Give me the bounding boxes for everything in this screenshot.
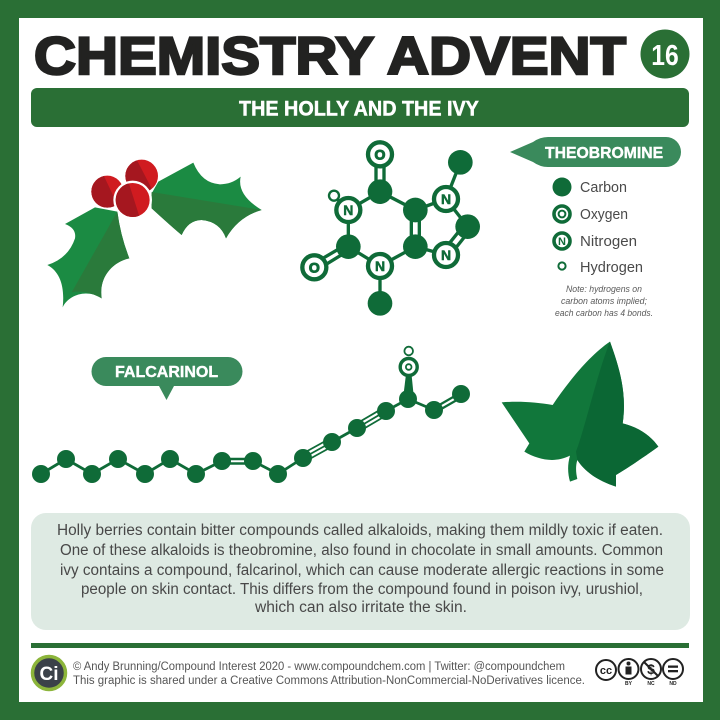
- icon: compound interest logo: [32, 656, 66, 690]
- legend: [552, 178, 643, 276]
- body text: One of these alkaloids is theobromine, also found in chocolate in small amounts. Common: [60, 542, 663, 559]
- theobromine hydrogen atom: [329, 191, 339, 201]
- holly berry top: [125, 160, 158, 190]
- body text: people on skin contact. This differs from the compound found in poison ivy, urushiol,: [81, 581, 643, 598]
- day number badge: [640, 30, 690, 78]
- footer rule: [31, 643, 689, 648]
- falcarinol carbon atoms: [32, 385, 470, 483]
- icon: holly: [47, 158, 262, 307]
- note text: carbon atoms implied;: [561, 296, 647, 306]
- footer credits: © Andy Brunning/Compound Interest 2020 - www.compoundchem.com | Twitter: @compoundchem: [73, 661, 565, 673]
- chart: falcarinol molecule: [32, 347, 470, 483]
- legend: oxygen: Oxygen: [580, 207, 628, 223]
- theobromine nitrogen atoms: N: [375, 258, 385, 274]
- label: falcarinol: [92, 357, 242, 400]
- label: theobromine: THEOBROMINE: [545, 145, 663, 162]
- note text: [555, 284, 653, 318]
- note text: each carbon has 4 bonds.: [555, 308, 653, 318]
- legend: nitrogen: [554, 233, 637, 250]
- footer credits: [73, 661, 585, 687]
- legend: nitrogen: Nitrogen: [580, 234, 637, 250]
- icon: creative commons licence badges: ND: [669, 681, 677, 687]
- label: falcarinol: FALCARINOL: [115, 364, 218, 381]
- body text: [57, 522, 664, 616]
- subtitle banner: THE HOLLY AND THE IVY: [239, 98, 479, 121]
- falcarinol hydroxyl group: [400, 347, 417, 399]
- theobromine nitrogen atoms: N: [441, 247, 451, 263]
- text panel: [31, 513, 690, 630]
- icon: compound interest logo: Ci: [40, 664, 58, 685]
- theobromine oxygen atoms: O: [375, 146, 386, 162]
- theobromine nitrogen atoms: N: [343, 202, 353, 218]
- theobromine bonds: [314, 162, 470, 303]
- icon: ivy leaf: [502, 342, 658, 487]
- holly berry left: [91, 176, 122, 208]
- icon: creative commons licence badges: $: [647, 661, 655, 677]
- theobromine carbon atoms: [336, 150, 480, 316]
- label: theobromine: [510, 137, 681, 167]
- title: CHEMISTRY ADVENT: [34, 26, 626, 85]
- theobromine nitrogen atoms: N: [441, 191, 451, 207]
- chart: theobromine molecule: [302, 142, 480, 316]
- holly right leaf: [152, 163, 262, 238]
- icon: creative commons licence badges: [596, 659, 683, 687]
- legend: hydrogen: Hydrogen: [580, 260, 643, 276]
- body text: ivy contains a compound, falcarinol, which can cause moderate allergic reactions in some: [60, 562, 664, 579]
- legend: nitrogen: N: [558, 236, 566, 248]
- note text: Note: hydrogens on: [566, 284, 642, 294]
- icon: creative commons licence badges: cc: [600, 665, 612, 677]
- legend: carbon: Carbon: [580, 180, 627, 196]
- theobromine nitrogen atoms: [336, 187, 458, 278]
- holly berry front: [113, 181, 153, 219]
- day number badge: 16: [651, 39, 679, 71]
- falcarinol bonds: [41, 392, 463, 474]
- icon: creative commons licence badges: BY: [625, 681, 633, 687]
- theobromine oxygen atoms: [302, 142, 392, 279]
- body text: Holly berries contain bitter compounds called alkaloids, making them mildly toxic if eaten.: [57, 522, 663, 539]
- footer credits: This graphic is shared under a Creative Commons Attribution-NonCommercial-NoDerivatives licence.: [73, 675, 585, 687]
- subtitle banner: [31, 88, 689, 127]
- theobromine oxygen atoms: O: [309, 259, 320, 275]
- holly left leaf: [47, 207, 129, 307]
- icon: creative commons licence badges: NC: [647, 681, 655, 687]
- body text: which can also irritate the skin.: [254, 599, 467, 616]
